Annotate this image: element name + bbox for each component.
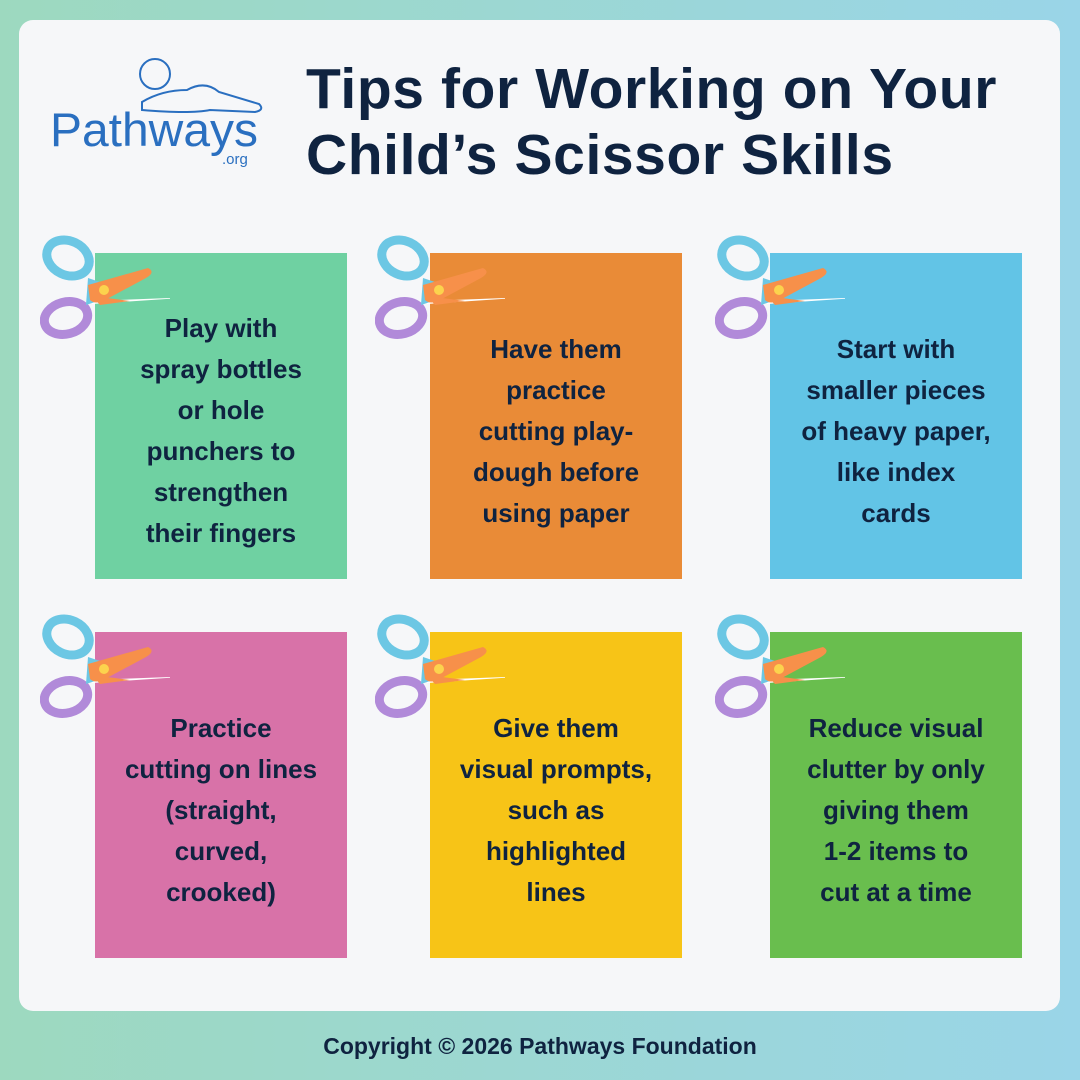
card 1 xyxy=(95,253,347,579)
card 1: their fingers xyxy=(146,518,296,548)
card 3: smaller pieces xyxy=(806,374,986,404)
card 2: cutting play- xyxy=(479,416,633,446)
card 5 xyxy=(430,632,682,958)
card 3: of heavy paper, xyxy=(801,416,991,446)
card 2: dough before xyxy=(473,456,639,486)
card 2: practice xyxy=(506,374,606,404)
title: Tips for Working on Your xyxy=(306,57,997,121)
card 4: crooked) xyxy=(166,876,276,906)
card 5: highlighted xyxy=(486,836,626,866)
icon: scissors 3 xyxy=(715,236,845,339)
card 3: like index xyxy=(837,456,955,486)
card 3 xyxy=(770,253,1022,579)
icon: scissors 4 xyxy=(40,614,170,718)
logo: .org xyxy=(222,151,248,168)
card 6: clutter by only xyxy=(807,754,985,784)
footer copyright: Copyright © 2026 Pathways Foundation xyxy=(323,1033,757,1059)
icon: baby xyxy=(140,59,261,112)
card 6: 1-2 items to xyxy=(824,836,968,866)
logo: Pathways xyxy=(50,103,258,156)
card 4: cutting on lines xyxy=(125,754,317,784)
card 5: lines xyxy=(526,876,586,906)
icon: scissors 2 xyxy=(375,236,505,339)
icon: scissors 6 xyxy=(715,614,845,718)
title: Child’s Scissor Skills xyxy=(306,123,894,187)
card 6: Reduce visual xyxy=(809,712,983,742)
title xyxy=(306,57,997,187)
card 1: or hole xyxy=(178,395,264,425)
card 6 xyxy=(770,632,1022,958)
card 5: visual prompts, xyxy=(460,754,652,784)
card 5: Give them xyxy=(493,712,619,742)
card 4: (straight, xyxy=(165,794,277,824)
icon: scissors 5 xyxy=(375,614,505,718)
card 2: using paper xyxy=(482,498,630,528)
card 1: Play with xyxy=(165,313,277,343)
card 3: cards xyxy=(861,498,931,528)
card 4: curved, xyxy=(175,836,267,866)
card 1: strengthen xyxy=(154,477,288,507)
card 2 xyxy=(430,253,682,579)
card 4: Practice xyxy=(170,712,272,742)
card 1: punchers to xyxy=(147,436,295,466)
card 3: Start with xyxy=(837,334,955,364)
logo xyxy=(50,58,262,168)
card 6: giving them xyxy=(823,794,969,824)
card 2: Have them xyxy=(490,334,622,364)
card 4 xyxy=(95,632,347,958)
card 5: such as xyxy=(508,794,604,824)
card 6: cut at a time xyxy=(820,876,972,906)
card 1: spray bottles xyxy=(140,354,302,384)
icon: scissors 1 xyxy=(40,236,170,339)
